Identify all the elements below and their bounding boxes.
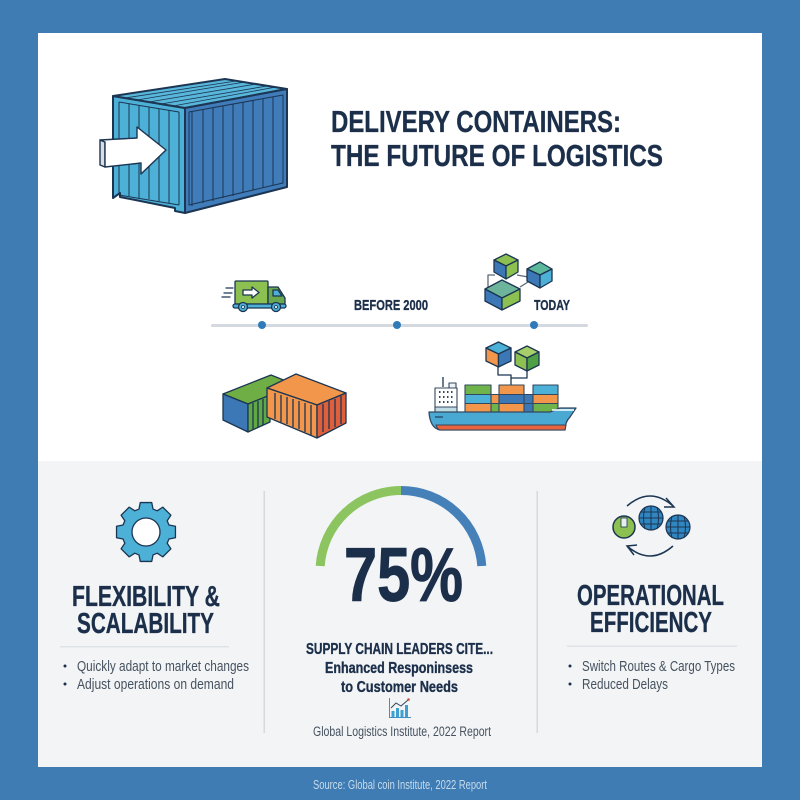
panel: operational efficiency (567, 496, 737, 693)
heading: flexibility and scalability (72, 581, 220, 640)
bullet list: flexibility: Quickly adapt to market changes (77, 659, 249, 675)
divider: left column (264, 491, 265, 733)
text: statistic caption (306, 641, 493, 696)
icon: cube above ship, green (515, 346, 539, 371)
bullet list: efficiency: Reduced Delays (582, 677, 668, 693)
bullet list: flexibility (64, 659, 249, 693)
icon: blue shipping container with arrow (100, 79, 287, 213)
heading: operational efficiency (577, 580, 724, 639)
icon: delivery truck (222, 281, 286, 312)
panel: upper white card (38, 33, 762, 461)
icon: rising bar chart (390, 698, 411, 718)
timeline label: before 2000: BEFORE 2000 (354, 298, 428, 314)
bullet list: efficiency (568, 659, 735, 693)
bullet list: efficiency: Switch Routes & Cargo Types (582, 659, 735, 675)
timeline (211, 321, 588, 329)
icon: connected cubes (485, 254, 552, 310)
gauge arc (320, 490, 482, 566)
bullet list: flexibility: Adjust operations on demand (77, 677, 234, 693)
icon: gear (117, 503, 175, 561)
text: statistic caption: to Customer Needs (341, 679, 458, 696)
icon: cube above ship, blue and orange (486, 342, 511, 367)
panel: key statistic (306, 490, 493, 739)
icon: container ship with cubes (429, 342, 576, 430)
heading: operational efficiency: EFFICIENCY (590, 607, 712, 639)
heading: operational efficiency: OPERATIONAL (577, 580, 724, 612)
timeline label: today: TODAY (534, 298, 570, 314)
icon: white arrow entering container (100, 127, 166, 174)
title: DELIVERY CONTAINERS: (331, 104, 621, 139)
text: statistic caption: SUPPLY CHAIN LEADERS CITE... (306, 641, 493, 658)
title: THE FUTURE OF LOGISTICS (331, 138, 663, 173)
text: statistic caption: Enhanced Responinsess (325, 660, 473, 677)
icon: stacked containers (223, 374, 346, 438)
panel: flexibility and scalability (60, 503, 249, 693)
heading: flexibility and scalability: SCALABILITY (77, 608, 214, 640)
heading: flexibility and scalability: FLEXIBILITY & (72, 581, 220, 613)
panel: lower stats band (38, 461, 762, 767)
icon: globes and cycle arrows (613, 496, 690, 556)
title (331, 104, 663, 173)
text: report citation: Global Logistics Institute, 2022 Report (313, 724, 491, 739)
footer source line: Source: Global coin Institute, 2022 Report (313, 778, 487, 792)
divider: right column (536, 491, 538, 733)
statistic: 75%: 75% (344, 533, 463, 618)
